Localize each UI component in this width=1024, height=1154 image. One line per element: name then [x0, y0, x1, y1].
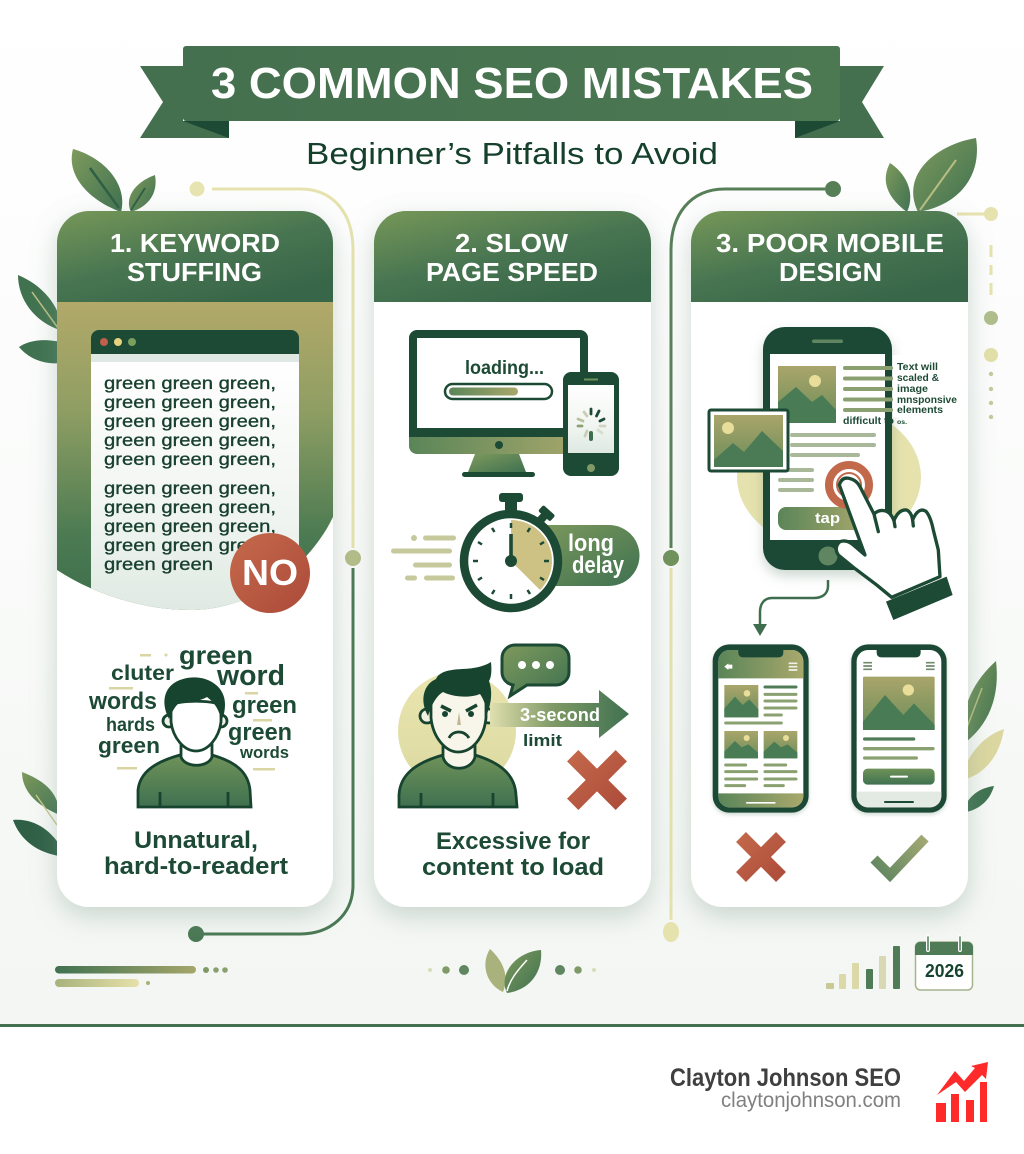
brand name: claytonjohnson.com	[721, 1089, 901, 1112]
repeated keyword text: green green green,	[104, 449, 276, 469]
icon: phone with spinner	[563, 372, 619, 476]
overflowing text lines: image	[897, 384, 928, 395]
repeated keyword text: green green	[104, 554, 213, 574]
tap target rings	[829, 465, 869, 505]
icon: overflowing image card	[709, 410, 788, 471]
card 3 header	[691, 211, 968, 302]
leaves: right of card 3	[962, 661, 1004, 813]
icon: good phone layout	[851, 644, 947, 813]
arrow: 3-second limit: limit	[523, 731, 562, 750]
card 1 header: 1. KEYWORD	[110, 228, 280, 258]
arrow: 3-second limit: 3-second	[520, 705, 600, 725]
leaves: top left	[72, 149, 156, 212]
brand name: Clayton Johnson SEO	[670, 1064, 901, 1092]
panel: card 3 poor mobile design	[691, 211, 968, 907]
overflowing text lines	[843, 355, 963, 427]
icon: red growth logo	[936, 1062, 988, 1122]
connector: top left to card 1 and card 2 gap	[188, 182, 361, 942]
word cloud: green	[179, 640, 253, 670]
NO badge	[230, 533, 310, 613]
overflowing text lines: os.	[897, 420, 907, 426]
repeated keyword text: green green green,	[104, 478, 276, 498]
icon: bad phone layout	[713, 644, 809, 813]
leaves: left of card 1	[18, 275, 62, 363]
icon: desktop monitor loading	[409, 330, 588, 477]
word cloud: green	[232, 692, 297, 719]
card 1 caption: hard-to-readert	[104, 853, 288, 880]
title banner	[140, 46, 884, 138]
panel: card 1 keyword stuffing	[57, 211, 333, 907]
icon: green check good	[874, 838, 925, 875]
card 1 caption	[104, 827, 288, 880]
speed lines	[391, 535, 456, 580]
icon: pointing hand	[836, 478, 953, 620]
bottom left decorative bars	[55, 966, 228, 987]
repeated keyword text: green green green,	[104, 516, 276, 536]
card 1 header: STUFFING	[127, 257, 262, 287]
word cloud: cluter	[111, 662, 174, 685]
card 2 header: PAGE SPEED	[426, 257, 598, 287]
icon: red X bad	[741, 837, 781, 877]
word cloud	[88, 640, 297, 770]
repeated keyword text	[104, 373, 276, 574]
pale circle behind phone	[737, 405, 921, 549]
footer divider	[0, 1024, 1024, 1027]
calendar icon 2026	[915, 937, 973, 990]
icon: frustrated person	[398, 662, 517, 807]
panel: card 2 slow page speed	[374, 211, 651, 907]
long delay pill	[530, 525, 640, 586]
leaves: bottom left	[13, 772, 60, 856]
icon: red X	[573, 756, 621, 804]
olive curved panel with browser window	[57, 302, 333, 614]
word cloud: words	[88, 688, 157, 715]
card 3 header: 3. POOR MOBILE	[716, 228, 944, 258]
calendar icon 2026: 2026	[925, 961, 964, 981]
brand name	[670, 1064, 901, 1112]
icon: phone with tap target: tap	[815, 510, 840, 527]
icon: stopwatch	[464, 493, 558, 608]
center leaf ornament	[428, 949, 596, 993]
subtitle: Beginner’s Pitfalls to Avoid	[306, 136, 718, 171]
card 2 header	[374, 211, 651, 302]
mini bar chart	[826, 946, 900, 989]
long delay pill: delay	[572, 552, 625, 579]
footer band	[0, 1027, 1024, 1154]
repeated keyword text: green green green,	[104, 411, 276, 431]
card 1 caption: Unnatural,	[134, 827, 258, 854]
overflowing text lines: Text will	[897, 362, 938, 373]
card 2 header: 2. SLOW	[455, 228, 568, 258]
overflowing text lines: mnsponsive	[897, 395, 957, 406]
arrow: 3-second limit	[490, 690, 629, 750]
speech bubble	[502, 645, 569, 696]
long delay pill: long	[568, 530, 614, 557]
arrow: down to phone comparison	[753, 580, 828, 636]
icon: overwhelmed person	[138, 677, 251, 807]
card 1 header	[57, 211, 333, 302]
card 2 caption: content to load	[422, 854, 604, 881]
word cloud: word	[216, 660, 285, 692]
overflowing text lines: elements	[897, 405, 943, 416]
repeated keyword text: green green green,	[104, 392, 276, 412]
repeated keyword text: green green green,	[104, 497, 276, 517]
card 3 header: DESIGN	[779, 257, 882, 287]
title text: 3 COMMON SEO MISTAKES	[211, 59, 813, 108]
connector: top right to card 2 and card 3 gap	[663, 181, 841, 942]
overflowing text lines: scaled &	[897, 373, 939, 384]
repeated keyword text: green green green,	[104, 373, 276, 393]
word cloud: green	[98, 733, 160, 758]
leaves: top right	[886, 138, 977, 212]
right side decorative markers	[957, 207, 998, 419]
icon: desktop monitor loading: loading...	[465, 358, 544, 379]
icon: phone with tap target	[763, 327, 892, 570]
word cloud: hards	[106, 715, 155, 736]
repeated keyword text: green green green,	[104, 430, 276, 450]
NO badge: NO	[242, 552, 298, 593]
repeated keyword text: green green green,	[104, 535, 276, 555]
card 2 caption: Excessive for	[436, 828, 590, 855]
word cloud: green	[228, 719, 292, 746]
overflowing text lines: difficult to	[843, 416, 894, 427]
card 2 caption	[422, 828, 604, 881]
word cloud: words	[239, 743, 289, 762]
